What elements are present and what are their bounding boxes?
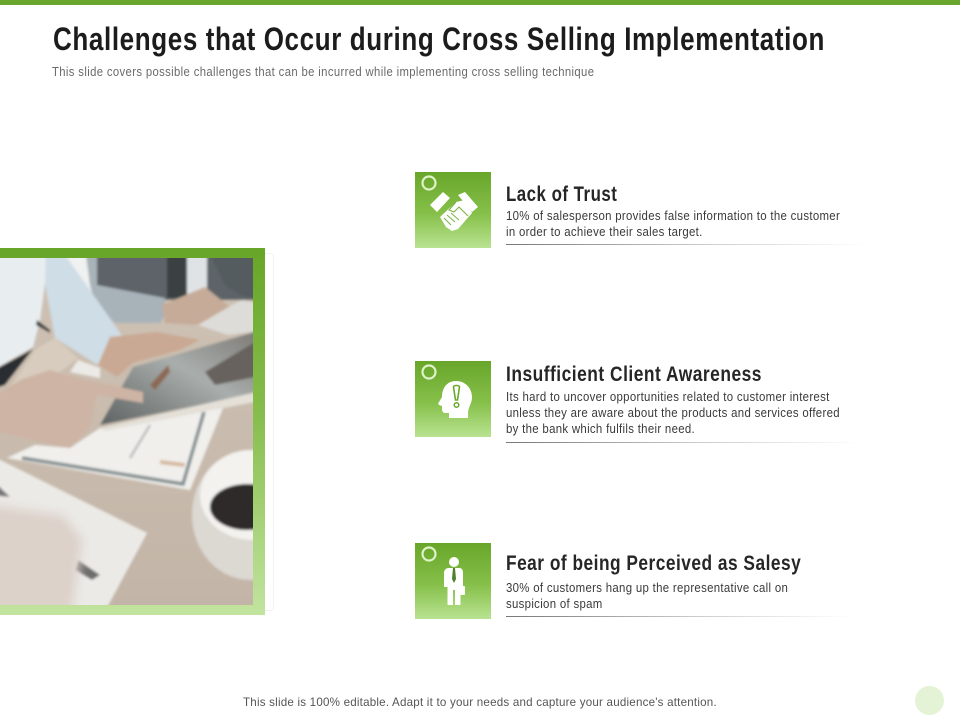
description: unless they are aware about the products and services offered	[506, 405, 840, 420]
icon: businessman	[415, 543, 491, 619]
description: 10% of salesperson provides false information to the customer	[506, 208, 840, 223]
description: 30% of customers hang up the representative call on	[506, 580, 788, 595]
description: Its hard to uncover opportunities related to customer interest	[506, 389, 830, 404]
heading: Insufficient Client Awareness	[506, 363, 762, 386]
photo panel	[0, 248, 274, 615]
icon: handshake	[415, 172, 491, 248]
page number badge	[915, 686, 944, 715]
card shadow outline	[200, 253, 274, 611]
title: Challenges that Occur during Cross Selling Implementation	[53, 21, 825, 57]
subtitle: This slide covers possible challenges that can be incurred while implementing cross selling technique	[52, 64, 594, 79]
footer note: This slide is 100% editable. Adapt it to your needs and capture your audience's attention.	[243, 695, 717, 709]
description	[506, 208, 840, 239]
heading: Fear of being Perceived as Salesy	[506, 552, 801, 575]
heading: Lack of Trust	[506, 183, 617, 206]
description: by the bank which fulfils their need.	[506, 421, 695, 436]
item: fear of being perceived as salesy	[415, 543, 826, 619]
description: suspicion of spam	[506, 596, 603, 611]
description	[506, 389, 840, 436]
underline	[506, 442, 861, 443]
icon: head with exclamation	[415, 361, 491, 437]
top accent bar	[0, 0, 960, 5]
underline	[506, 616, 851, 617]
item: lack of trust	[415, 172, 840, 248]
description	[506, 580, 788, 611]
green frame	[0, 248, 265, 615]
description: in order to achieve their sales target.	[506, 224, 703, 239]
item: insufficient client awareness	[415, 361, 840, 443]
photo: business meeting with tablet	[0, 258, 253, 605]
underline	[506, 244, 866, 245]
